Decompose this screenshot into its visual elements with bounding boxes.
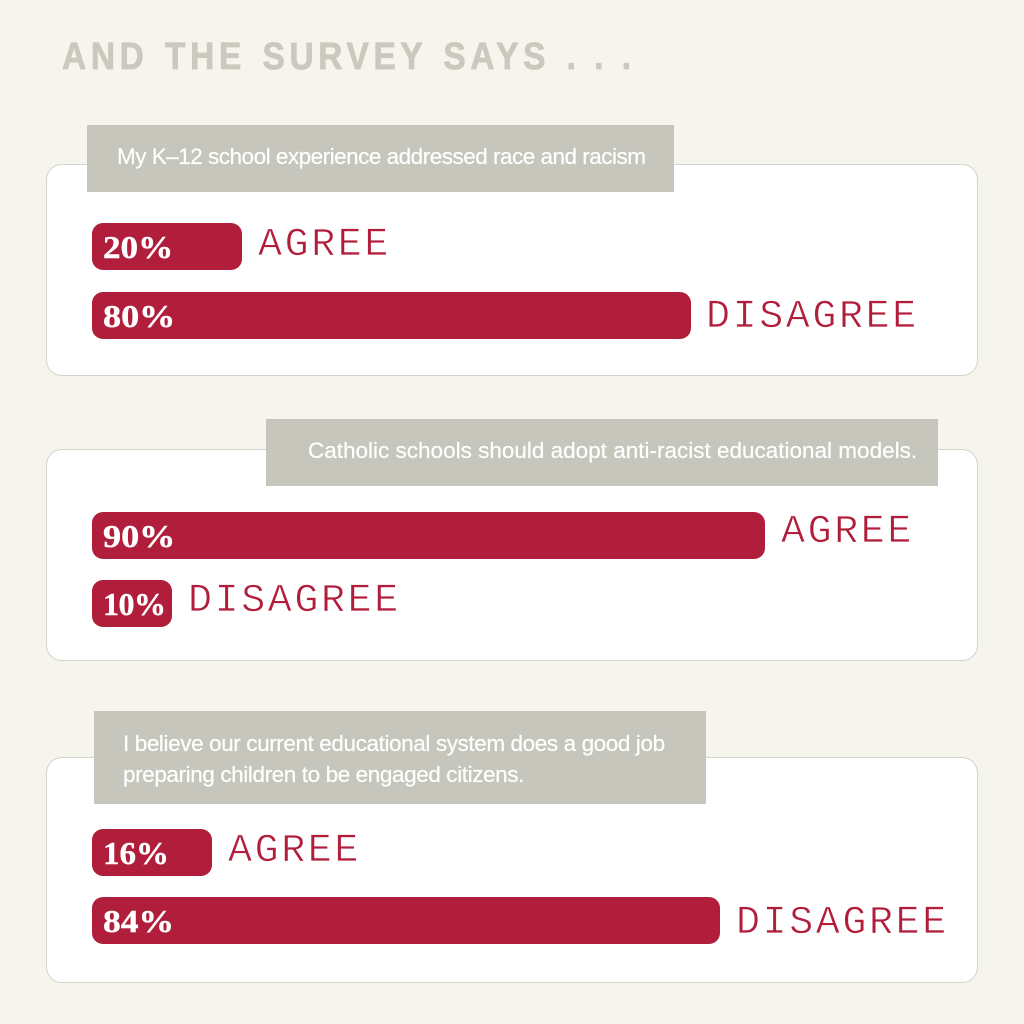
question: anti-racist models (266, 419, 938, 486)
question: anti-racist models: Catholic schools should adopt anti-racist educational models. (308, 438, 917, 463)
bar: 90% agree (92, 512, 765, 559)
question: K-12 experience (87, 125, 674, 192)
bar: 80% disagree (92, 292, 691, 339)
label: disagree: DISAGREE (736, 901, 949, 946)
question: engaged citizens (94, 711, 706, 804)
bar: 20% agree: 20% (103, 229, 173, 265)
panel: K-12 experience (46, 164, 978, 376)
bar: 80% disagree: 80% (103, 298, 175, 334)
label: disagree: DISAGREE (706, 295, 919, 340)
bar: 10% disagree: 10% (103, 586, 166, 622)
question: engaged citizens: preparing children to be engaged citizens. (123, 762, 524, 787)
label: agree: AGREE (781, 510, 914, 555)
bar: 20% agree (92, 223, 242, 270)
label: disagree: DISAGREE (188, 579, 401, 624)
question: K-12 experience: My K–12 school experience addressed race and racism (117, 144, 646, 169)
bar: 16% agree: 16% (103, 835, 169, 871)
bar: 10% disagree (92, 580, 172, 627)
bar: 90% agree: 90% (103, 518, 175, 554)
question: engaged citizens: I believe our current educational system does a good job (123, 731, 665, 756)
label: agree: AGREE (228, 829, 361, 874)
bar: 84% disagree: 84% (103, 903, 174, 939)
bar: 84% disagree (92, 897, 720, 944)
bar: 16% agree (92, 829, 212, 876)
panel: engaged citizens (46, 757, 978, 983)
title: AND THE SURVEY SAYS . . . (62, 36, 634, 78)
label: agree: AGREE (258, 223, 391, 268)
panel: anti-racist models (46, 449, 978, 661)
